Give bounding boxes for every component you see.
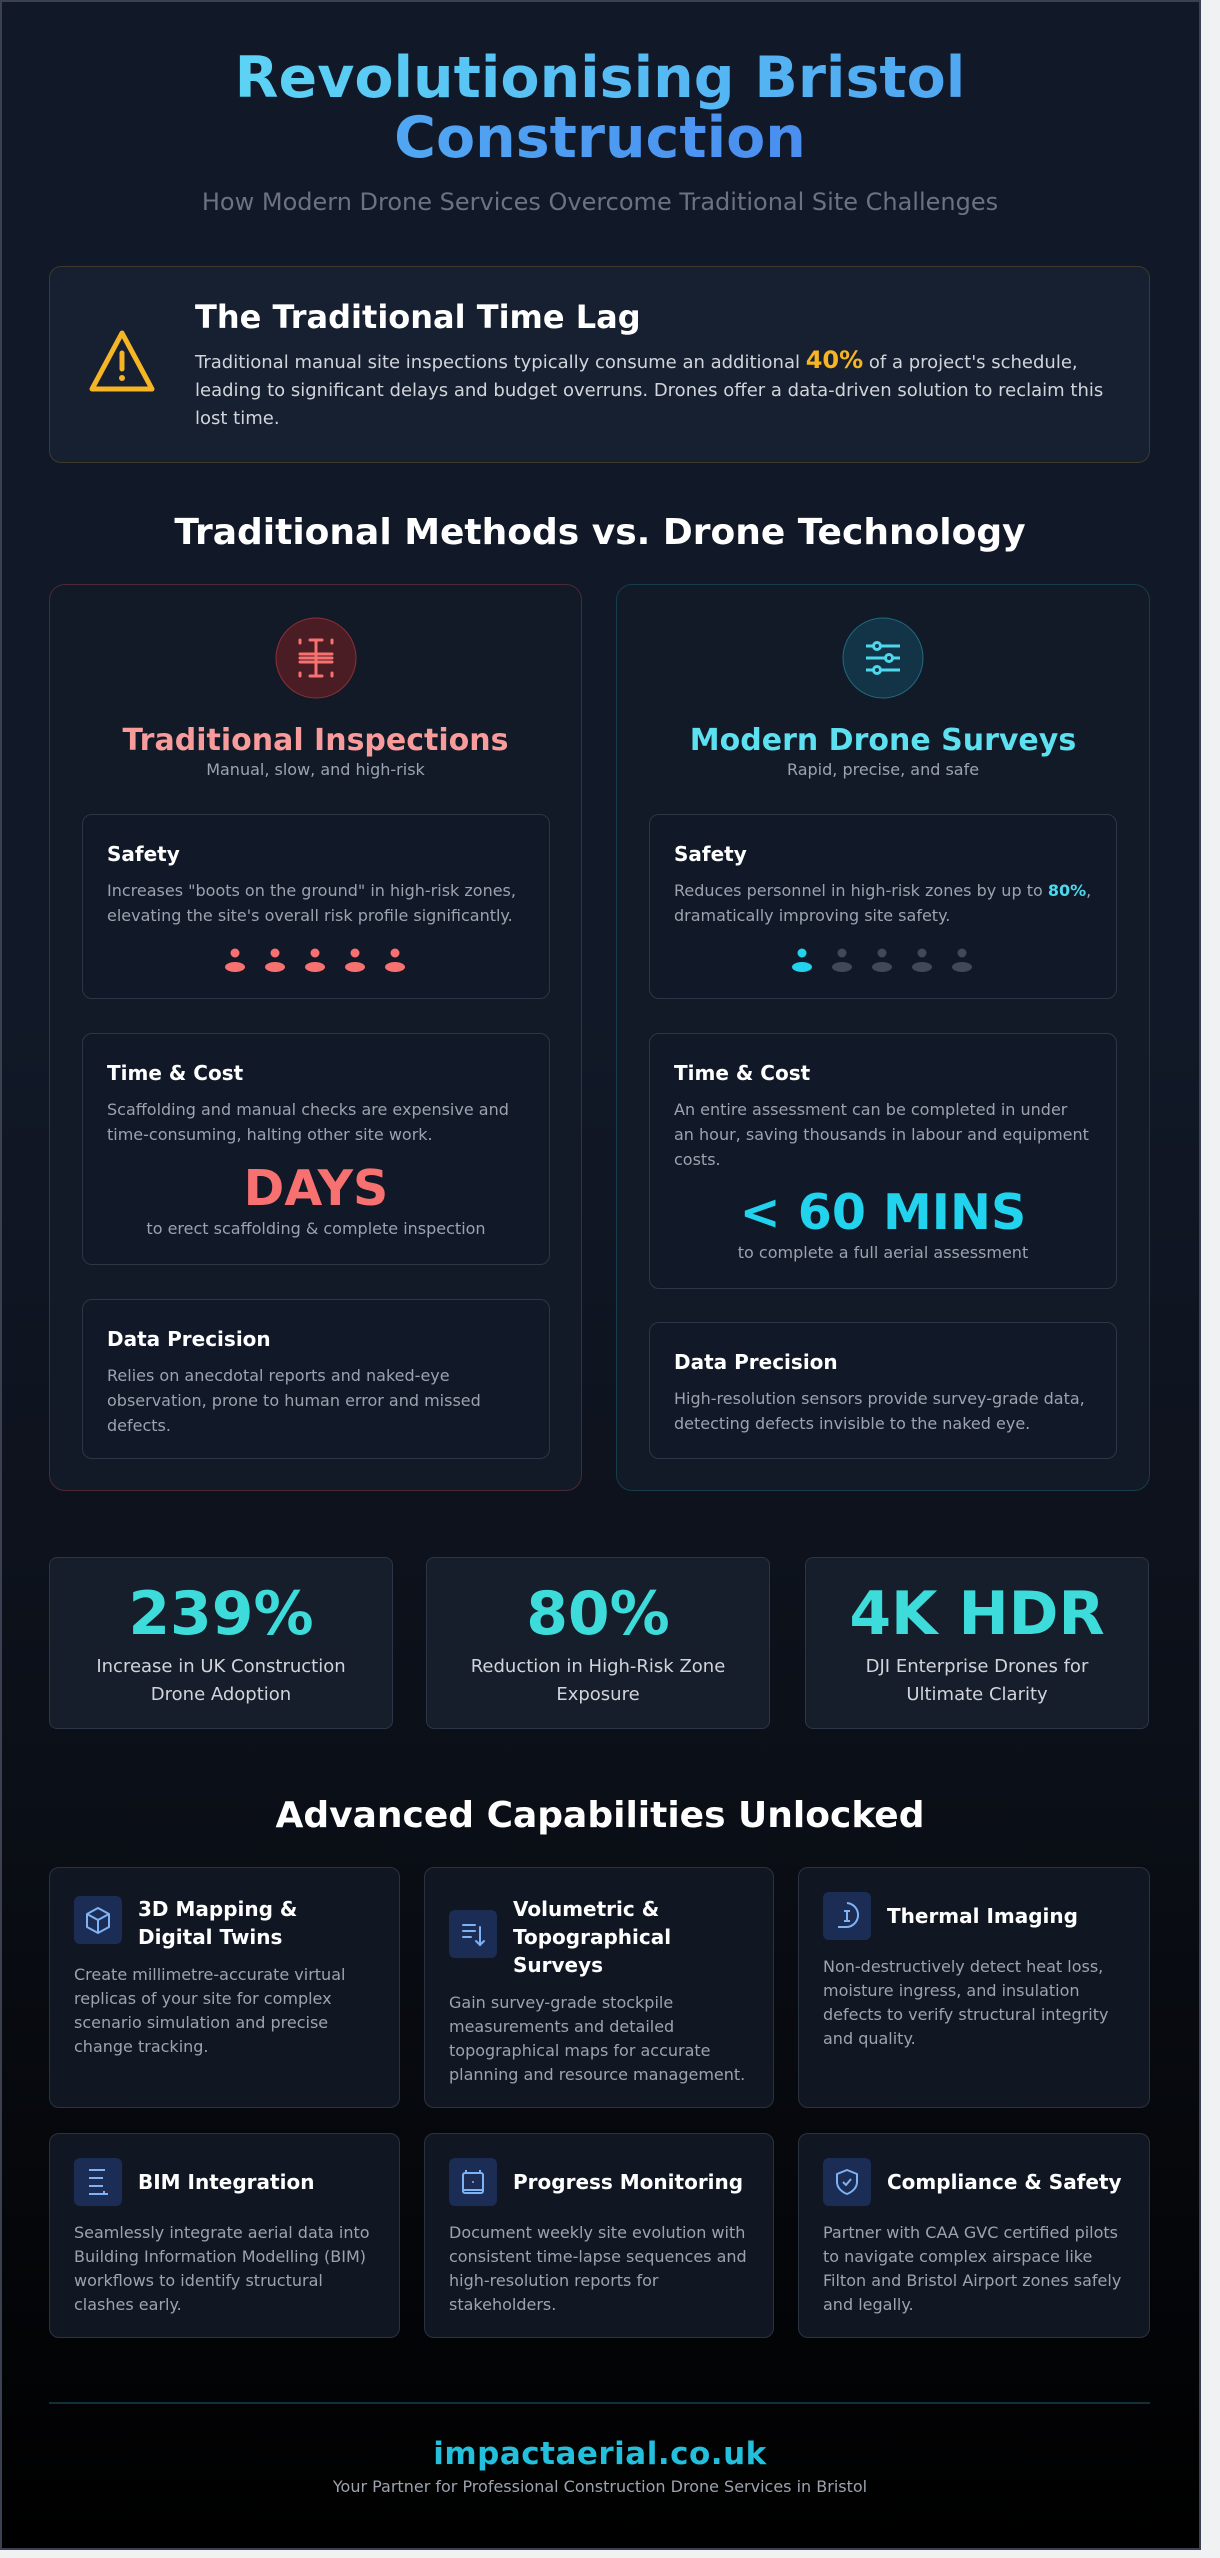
stat: 4K HDR [805,1557,1149,1729]
big number: days: DAYS [244,1160,388,1217]
panel: traditional [49,584,582,1491]
section heading: comparison: Traditional Methods vs. Drone Technology [174,512,1026,553]
capability: volumetric [424,1867,774,2108]
stat: 80%: Reduction in High-Risk Zone [471,1656,725,1677]
card: time & cost [649,1033,1117,1289]
capability: BIM [49,2133,400,2338]
card: safety: Safety [674,842,747,866]
stat: 80% [426,1557,770,1729]
card: data precision: Data Precision [107,1327,271,1351]
icon: traditional [276,618,356,698]
card: time & cost: to complete a full aerial assessment [738,1243,1028,1262]
card: data precision [82,1299,550,1459]
icon: sort down [449,1910,497,1958]
card: time & cost: to erect scaffolding & complete inspection [146,1219,486,1238]
subheading: Manual, slow, and high-risk [206,760,425,779]
capability: volumetric: Topographical [513,1925,671,1949]
capability: 3D mapping: 3D Mapping & [138,1897,297,1921]
icon: cube [74,1896,122,1944]
stat: 239%: Drone Adoption [151,1684,291,1705]
capability: thermal: Thermal Imaging [887,1904,1078,1928]
card: data precision: Data Precision [674,1350,838,1374]
card: safety: Reduces personnel in high-risk zones by up to 80%, dramatically improving site safety. [674,881,1091,925]
footer [332,2436,867,2496]
capability: 3D mapping: Create millimetre-accurate virtual replicas of your site for complex scenario simulation and precise change tracking. [74,1965,345,2056]
card: time & cost: Scaffolding and manual checks are expensive and time-consuming, halting other site work. [107,1100,509,1144]
heading: The Traditional Time Lag [195,298,641,336]
capability: BIM: Seamlessly integrate aerial data into Building Information Modelling (BIM) workflows to identify structural clashes early. [74,2223,370,2314]
icon: calendar [449,2158,497,2206]
card: time & cost: Time & Cost [674,1061,810,1085]
capability: compliance [798,2133,1150,2338]
card: data precision: Relies on anecdotal reports and naked-eye observation, prone to human error and missed defects. [107,1366,481,1435]
capability: thermal: Non-destructively detect heat loss, moisture ingress, and insulation defects to verify structural integrity and quality. [823,1957,1108,2048]
capability: progress: Document weekly site evolution with consistent time-lapse sequences and high-resolution reports for stakeholders. [449,2223,747,2314]
capability: progress [424,2133,774,2338]
capability: 3D mapping: Digital Twins [138,1925,282,1949]
card: data precision [649,1322,1117,1459]
card: safety [649,814,1117,999]
icon: people [225,948,405,972]
footer: tagline: Your Partner for Professional Construction Drone Services in Bristol [333,2477,867,2496]
icon: warning [90,330,154,392]
icon: thermal [823,1892,871,1940]
icon: people [792,948,972,972]
subtitle: How Modern Drone Services Overcome Traditional Site Challenges [202,188,998,216]
section heading: capabilities: Advanced Capabilities Unlocked [275,1795,924,1836]
capability: compliance: Partner with CAA GVC certified pilots to navigate complex airspace like Filton and Bristol Airport zones safely and legally. [823,2223,1121,2314]
capability: BIM: BIM Integration [138,2170,314,2194]
capability: thermal [798,1867,1150,2108]
stat: 239% [49,1557,393,1729]
footer: url: impactaerial.co.uk [433,2436,767,2472]
body text: Traditional manual site inspections typically consume an additional 40% of a project's schedule, leading to significant delays and budget overruns. Drones offer a data-driven solution to reclaim this lost time. [195,346,1103,429]
card: safety: Increases "boots on the ground" in high-risk zones, elevating the site's overall risk profile significantly. [107,881,516,925]
stat: 239%: Increase in UK Construction [96,1656,346,1677]
card: time & cost: Time & Cost [107,1061,243,1085]
capability: volumetric: Surveys [513,1953,603,1977]
heading: Modern Drone Surveys [690,723,1076,758]
stat: 4K HDR: DJI Enterprise Drones for [866,1656,1088,1677]
icon: shield [823,2158,871,2206]
title [235,45,965,171]
card: safety [82,814,550,999]
icon: list [74,2158,122,2206]
subheading: Rapid, precise, and safe [787,760,979,779]
icon: sliders [842,618,924,698]
callout: time lag [49,266,1150,463]
card: time & cost [82,1033,550,1265]
card: safety: Safety [107,842,180,866]
stat: 4K HDR: 4K HDR [849,1579,1105,1649]
capability: progress: Progress Monitoring [513,2170,743,2194]
stat: 239%: 239% [128,1579,314,1649]
capability: 3D mapping [49,1867,400,2108]
panel: drone [616,584,1150,1491]
card: data precision: High-resolution sensors provide survey-grade data, detecting defects invisible to the naked eye. [674,1389,1085,1433]
stat: 4K HDR: Ultimate Clarity [906,1684,1048,1705]
heading: Traditional Inspections [123,723,508,758]
capability: volumetric: Volumetric & [513,1897,659,1921]
big number: 60 mins: < 60 MINS [740,1184,1026,1241]
title: Construction [394,105,806,171]
stat: 80%: 80% [526,1579,670,1649]
capability: compliance: Compliance & Safety [887,2170,1122,2194]
title: Revolutionising Bristol [235,45,965,111]
card: time & cost: An entire assessment can be completed in under an hour, saving thousands in labour and equipment costs. [674,1100,1089,1169]
capability: volumetric: Gain survey-grade stockpile measurements and detailed topographical maps for accurate planning and resource management. [449,1993,745,2084]
stat: 80%: Exposure [556,1684,640,1705]
